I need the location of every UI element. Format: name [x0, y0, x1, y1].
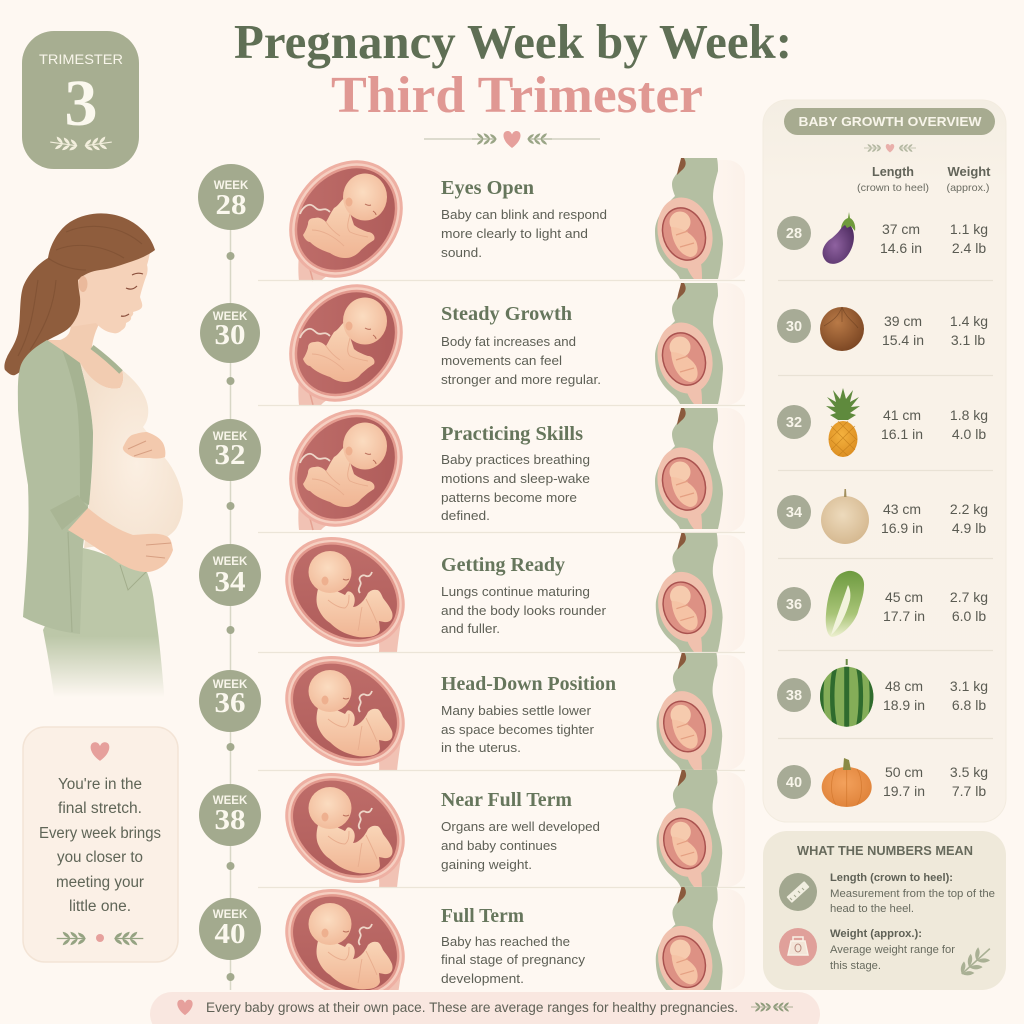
- upper hand: [123, 432, 165, 459]
- fetus week 30: [266, 261, 426, 425]
- growth row 34: 34: [786, 505, 802, 521]
- length explanation: Measurement from the top of the: [830, 888, 995, 900]
- badge week 32: WEEK: [213, 431, 248, 443]
- length 36: [883, 589, 925, 624]
- badge week 36: WEEK: [213, 679, 248, 691]
- row 28: [198, 137, 745, 301]
- growth row 40: 40: [786, 775, 802, 791]
- description: and fuller.: [441, 621, 500, 636]
- heading: Eyes Open: [441, 177, 534, 199]
- growth row 30: 30: [786, 319, 802, 335]
- weight 30: 1.4 kg: [950, 313, 988, 329]
- badge week 30: WEEK: [213, 311, 248, 323]
- badge week 40: WEEK: [213, 909, 248, 921]
- description: development.: [441, 971, 524, 986]
- cardigan lower edge: [68, 532, 72, 632]
- growth row 38: [777, 659, 988, 730]
- description: gaining weight.: [441, 857, 532, 872]
- description: movements can feel: [441, 353, 562, 368]
- description: as space becomes tighter: [441, 722, 595, 737]
- card text: little one.: [69, 898, 131, 915]
- column headers: Weight: [948, 164, 991, 179]
- weight 32: 1.8 kg: [950, 407, 988, 423]
- description: and the body looks rounder: [441, 603, 607, 618]
- length 36: 45 cm: [885, 589, 923, 605]
- length explanation: head to the heel.: [830, 903, 914, 915]
- badge week 28: [198, 164, 264, 230]
- length 34: [881, 501, 923, 536]
- weight 38: [950, 678, 988, 713]
- length 40: 19.7 in: [883, 783, 925, 799]
- ear: [78, 276, 88, 292]
- footer heart: [177, 1000, 193, 1015]
- heading: Full Term: [441, 905, 524, 927]
- length 30: [882, 313, 924, 348]
- cardigan collar: [92, 347, 121, 372]
- growth row 32: 32: [786, 415, 802, 431]
- heading: Steady Growth: [441, 303, 572, 325]
- footer note: [150, 992, 820, 1024]
- card ornament: [57, 932, 143, 945]
- length 28: 14.6 in: [880, 240, 922, 256]
- growth row 28: [777, 212, 988, 264]
- timeline line: [230, 197, 232, 990]
- badge week 40: 40: [214, 919, 246, 950]
- row 36: [199, 633, 745, 789]
- subtitle: Third Trimester: [331, 67, 703, 124]
- footer sprig: [751, 1002, 793, 1012]
- header ornament: [864, 144, 916, 152]
- length 30: 15.4 in: [882, 332, 924, 348]
- description: more clearly to light and: [441, 226, 588, 241]
- icon: scale: [779, 928, 817, 966]
- pants: [43, 548, 165, 704]
- leg fade: [20, 636, 180, 708]
- weight 32: 4.0 lb: [952, 426, 986, 442]
- length 40: 50 cm: [885, 764, 923, 780]
- badge week 40: [199, 898, 261, 960]
- growth row 36: [777, 571, 988, 637]
- badge: trimester 3: [22, 31, 139, 169]
- description: [441, 703, 595, 755]
- fetus week 36: [264, 633, 426, 789]
- card text: You're in the: [58, 776, 142, 793]
- timeline dot: [226, 743, 234, 751]
- woman illustration: [4, 213, 183, 708]
- weight 38: 6.8 lb: [952, 697, 986, 713]
- description: in the uterus.: [441, 740, 521, 755]
- length 40: [883, 764, 925, 799]
- weight 28: [950, 221, 988, 256]
- length 36: 17.7 in: [883, 608, 925, 624]
- icon: lettuce: [826, 571, 864, 637]
- badge week 38: WEEK: [213, 795, 248, 807]
- title: Pregnancy Week by Week:: [234, 14, 792, 69]
- badge label: TRIMESTER: [39, 51, 123, 67]
- length 32: 16.1 in: [881, 426, 923, 442]
- card text: [39, 776, 161, 915]
- title ornament: [424, 131, 600, 148]
- weight 34: [950, 501, 988, 536]
- sleeve cuff: [50, 495, 88, 530]
- icon: pumpkin: [822, 758, 872, 807]
- length explanation: Length (crown to heel):: [830, 872, 953, 884]
- column headers: (approx.): [946, 182, 990, 194]
- badge number: 3: [64, 67, 98, 140]
- description: patterns become more: [441, 490, 577, 505]
- description: [441, 207, 607, 260]
- row 32: [199, 386, 745, 550]
- badge week 28: 28: [216, 190, 246, 221]
- hair: [4, 213, 155, 375]
- icon: eggplant: [823, 212, 855, 264]
- description: motions and sleep-wake: [441, 471, 590, 486]
- weight 36: 6.0 lb: [952, 608, 986, 624]
- card text: meeting your: [56, 874, 144, 891]
- badge week 38: [199, 784, 261, 846]
- icon: ruler: [779, 873, 817, 911]
- week marker: [777, 678, 811, 712]
- description: Many babies settle lower: [441, 703, 592, 718]
- neck and chest: [47, 322, 123, 389]
- badge week 30: [200, 303, 260, 363]
- row 40: [199, 886, 745, 990]
- card text: you closer to: [57, 849, 143, 866]
- timeline dot: [226, 973, 234, 981]
- description: and baby continues: [441, 838, 558, 853]
- card text: final stretch.: [58, 800, 142, 817]
- icon: melon: [821, 489, 869, 544]
- description: Organs are well developed: [441, 819, 600, 834]
- growth row 36: 36: [786, 597, 802, 613]
- face: [70, 252, 150, 333]
- badge week 30: 30: [214, 320, 246, 351]
- weight 30: 3.1 lb: [951, 332, 985, 348]
- card text: Every week brings: [39, 825, 161, 842]
- maternal profile: [650, 408, 723, 529]
- length 30: 39 cm: [884, 313, 922, 329]
- weight 36: 2.7 kg: [950, 589, 988, 605]
- description: [441, 934, 586, 986]
- row 30: [200, 261, 745, 425]
- badge week 38: 38: [214, 805, 246, 836]
- row 34: [199, 514, 745, 670]
- weight 28: 1.1 kg: [950, 221, 988, 237]
- length 32: 41 cm: [883, 407, 921, 423]
- timeline dot: [226, 862, 234, 870]
- heading: Near Full Term: [441, 789, 572, 811]
- description: Lungs continue maturing: [441, 584, 590, 599]
- description: sound.: [441, 245, 482, 260]
- length 28: [880, 221, 922, 256]
- maternal profile: [650, 283, 723, 404]
- growth row 28: 28: [786, 226, 802, 242]
- length 38: [883, 678, 925, 713]
- fetus week 38: [264, 750, 426, 906]
- fetus week 40: [285, 889, 405, 990]
- panel header: [784, 108, 995, 135]
- description: [441, 452, 590, 523]
- heading: Getting Ready: [441, 554, 565, 576]
- badge week 36: [199, 670, 261, 732]
- maternal profile: [650, 158, 723, 279]
- description: Body fat increases and: [441, 334, 576, 349]
- panel header: BABY GROWTH OVERVIEW: [798, 114, 982, 129]
- timeline dot: [226, 626, 234, 634]
- weight explanation: Average weight range for: [830, 944, 955, 956]
- weight 34: 4.9 lb: [952, 520, 986, 536]
- weight 34: 2.2 kg: [950, 501, 988, 517]
- length 38: 18.9 in: [883, 697, 925, 713]
- badge week 34: 34: [214, 567, 246, 598]
- weight 30: [950, 313, 988, 348]
- maternal profile: [651, 533, 723, 652]
- weight 28: 2.4 lb: [952, 240, 986, 256]
- icon: pineapple: [826, 388, 860, 457]
- fetus week 34: [264, 514, 426, 670]
- length 28: 37 cm: [882, 221, 920, 237]
- badge laurel: [49, 136, 113, 152]
- weight 36: [950, 589, 988, 624]
- timeline dot: [226, 377, 234, 385]
- heading: Practicing Skills: [441, 423, 583, 445]
- weight explanation: this stage.: [830, 960, 881, 972]
- length 34: 16.9 in: [881, 520, 923, 536]
- row 38: [199, 750, 745, 906]
- icon: leaf sprig: [956, 942, 996, 981]
- timeline dot: [226, 502, 234, 510]
- description: stronger and more regular.: [441, 372, 601, 387]
- description: defined.: [441, 508, 490, 523]
- growth row 40: [777, 758, 988, 807]
- badge week 34: [199, 544, 261, 606]
- description: [441, 584, 607, 636]
- cardigan front band: [62, 350, 93, 505]
- card heart: [91, 742, 109, 761]
- weight 32: [950, 407, 988, 442]
- growth row 34: [777, 489, 988, 544]
- length 34: 43 cm: [883, 501, 921, 517]
- icon: watermelon: [820, 659, 874, 727]
- length explanation: [830, 872, 995, 915]
- length 38: 48 cm: [885, 678, 923, 694]
- badge week 28: WEEK: [214, 180, 249, 192]
- badge week 34: WEEK: [213, 556, 248, 568]
- description: [441, 819, 600, 872]
- description: final stage of pregnancy: [441, 952, 586, 967]
- badge week 32: 32: [214, 440, 246, 471]
- weight 38: 3.1 kg: [950, 678, 988, 694]
- description: [441, 334, 601, 387]
- weight explanation: [830, 928, 955, 972]
- maternal profile: [656, 887, 723, 990]
- length 32: [881, 407, 923, 442]
- title: [234, 14, 792, 124]
- footer text: Every baby grows at their own pace. These are average ranges for healthy pregnancies.: [206, 1000, 738, 1015]
- growth row 30: [777, 307, 988, 351]
- badge week 32: [199, 419, 261, 481]
- weight 40: 3.5 kg: [950, 764, 988, 780]
- weight 40: 7.7 lb: [952, 783, 986, 799]
- maternal profile: [652, 653, 722, 770]
- column headers: (crown to heel): [857, 182, 929, 194]
- maternal profile: [652, 770, 722, 887]
- weight 40: [950, 764, 988, 799]
- description: Baby has reached the: [441, 934, 570, 949]
- column headers: Length: [872, 164, 914, 179]
- icon: coconut: [820, 307, 864, 351]
- fetus week 32: [266, 386, 426, 550]
- timeline dot: [226, 252, 234, 260]
- forearm and lower hand: [68, 508, 173, 572]
- panel title: WHAT THE NUMBERS MEAN: [797, 844, 973, 858]
- badge week 36: 36: [214, 688, 246, 719]
- growth row 32: [777, 388, 988, 457]
- week marker: 38: [786, 688, 802, 704]
- fetus week 28: [266, 137, 426, 301]
- cream top: [80, 362, 183, 548]
- description: Baby can blink and respond: [441, 207, 607, 222]
- heading: Head-Down Position: [441, 673, 616, 695]
- description: Baby practices breathing: [441, 452, 590, 467]
- message card: [23, 727, 178, 962]
- cardigan: [18, 340, 93, 634]
- weight explanation: Weight (approx.):: [830, 928, 922, 940]
- panel: what the numbers mean: [763, 831, 1006, 990]
- panel: baby growth overview: [763, 100, 1006, 822]
- column headers: [857, 164, 991, 194]
